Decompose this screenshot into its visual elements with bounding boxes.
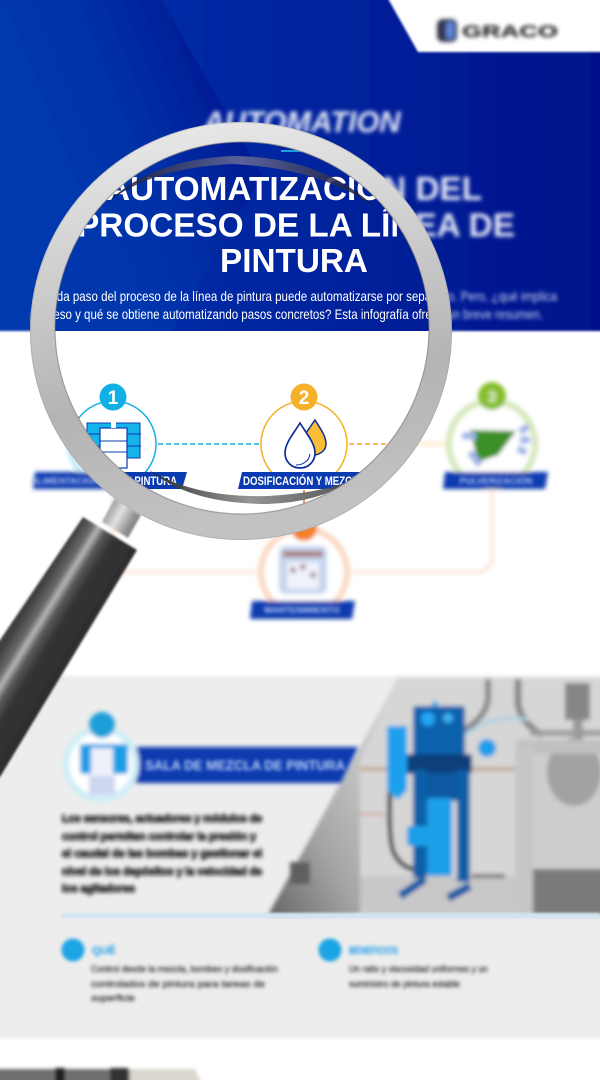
callout: what: controlados de pintura para tareas de: [91, 979, 265, 990]
connector lines: [158, 443, 260, 445]
lens: sharp content: [55, 142, 429, 504]
body text: Los sensores, actuadores y módulos de: [62, 813, 262, 825]
body text: [62, 813, 262, 895]
logo tab: [386, 0, 600, 52]
title blurred: PINTURA: [220, 243, 368, 280]
step 1: 1: [108, 388, 119, 409]
logo: Graco: GRACO: [462, 22, 558, 41]
callout: what: [62, 938, 278, 1004]
title blurred: AUTOMATIZACIÓN DEL: [106, 170, 482, 208]
header band: [0, 0, 600, 331]
kicker: Automation: AUTOMATION: [202, 106, 401, 139]
title: PROCESO DE LA LÍNEA DE: [77, 206, 515, 244]
panel: mixing room: [0, 676, 600, 1038]
callout: what: Control desde la mezcla, bombeo y dosificación: [91, 964, 278, 975]
title blurred: [77, 170, 515, 280]
label: step 2: DOSIFICACIÓN Y MEZCLA: [243, 473, 365, 488]
diagram labels blurred: ALIMENTACIÓN: [31, 475, 99, 486]
diagram labels blurred: [31, 475, 532, 615]
header inside lens: [55, 142, 429, 331]
callout: what: QUÉ: [92, 944, 116, 957]
process diagram blurred: 3: [488, 389, 497, 406]
title: [80, 176, 397, 272]
label: step 1: ALIMENTACIÓN DE PINTURA: [43, 473, 177, 488]
magnifying glass handle: [0, 498, 141, 777]
intro blurred: [31, 288, 557, 322]
next section photo: [0, 1068, 205, 1080]
icon: drops: [306, 420, 326, 455]
callout: what: superficie: [91, 993, 135, 1004]
body text: control permiten controlar la presión y: [62, 831, 257, 843]
label: step 1: [124, 472, 187, 489]
callout: benefits: [318, 938, 488, 990]
callout: benefits: BENEFICIOS: [349, 945, 398, 957]
step 2: [260, 384, 348, 472]
photo: paint room equipment: [268, 678, 600, 915]
intro text: [55, 291, 429, 322]
process diagram blurred: [33, 382, 548, 619]
magnifying glass ring: [30, 122, 452, 540]
lens inner reflection: [107, 156, 375, 520]
body text: el caudal de las bombas y gestionar el: [62, 848, 262, 860]
title: PINTURA: [220, 243, 368, 280]
title: AUTOMATIZACIÓN DEL: [106, 170, 482, 208]
callout: benefits: suministro de pintura estable: [349, 979, 460, 990]
title blurred: PROCESO DE LA LÍNEA DE: [77, 206, 515, 244]
logo: Graco: [437, 19, 558, 42]
step 1: [78, 384, 157, 472]
step 2: 2: [299, 388, 309, 409]
diagram labels blurred: MANTENIMIENTO: [264, 605, 340, 615]
heading: mixing room: SALA DE MEZCLA DE PINTURA: [145, 758, 345, 773]
icon: room badge: [66, 712, 358, 799]
diagram labels blurred: PULVERIZACIÓN: [460, 475, 532, 486]
label: step 2: [238, 472, 360, 489]
callout: benefits: Un ratio y viscosidad uniformes y un: [349, 964, 488, 975]
body text: nivel de los depósitos y la velocidad de: [62, 866, 262, 878]
body text: los agitadores: [62, 883, 135, 895]
